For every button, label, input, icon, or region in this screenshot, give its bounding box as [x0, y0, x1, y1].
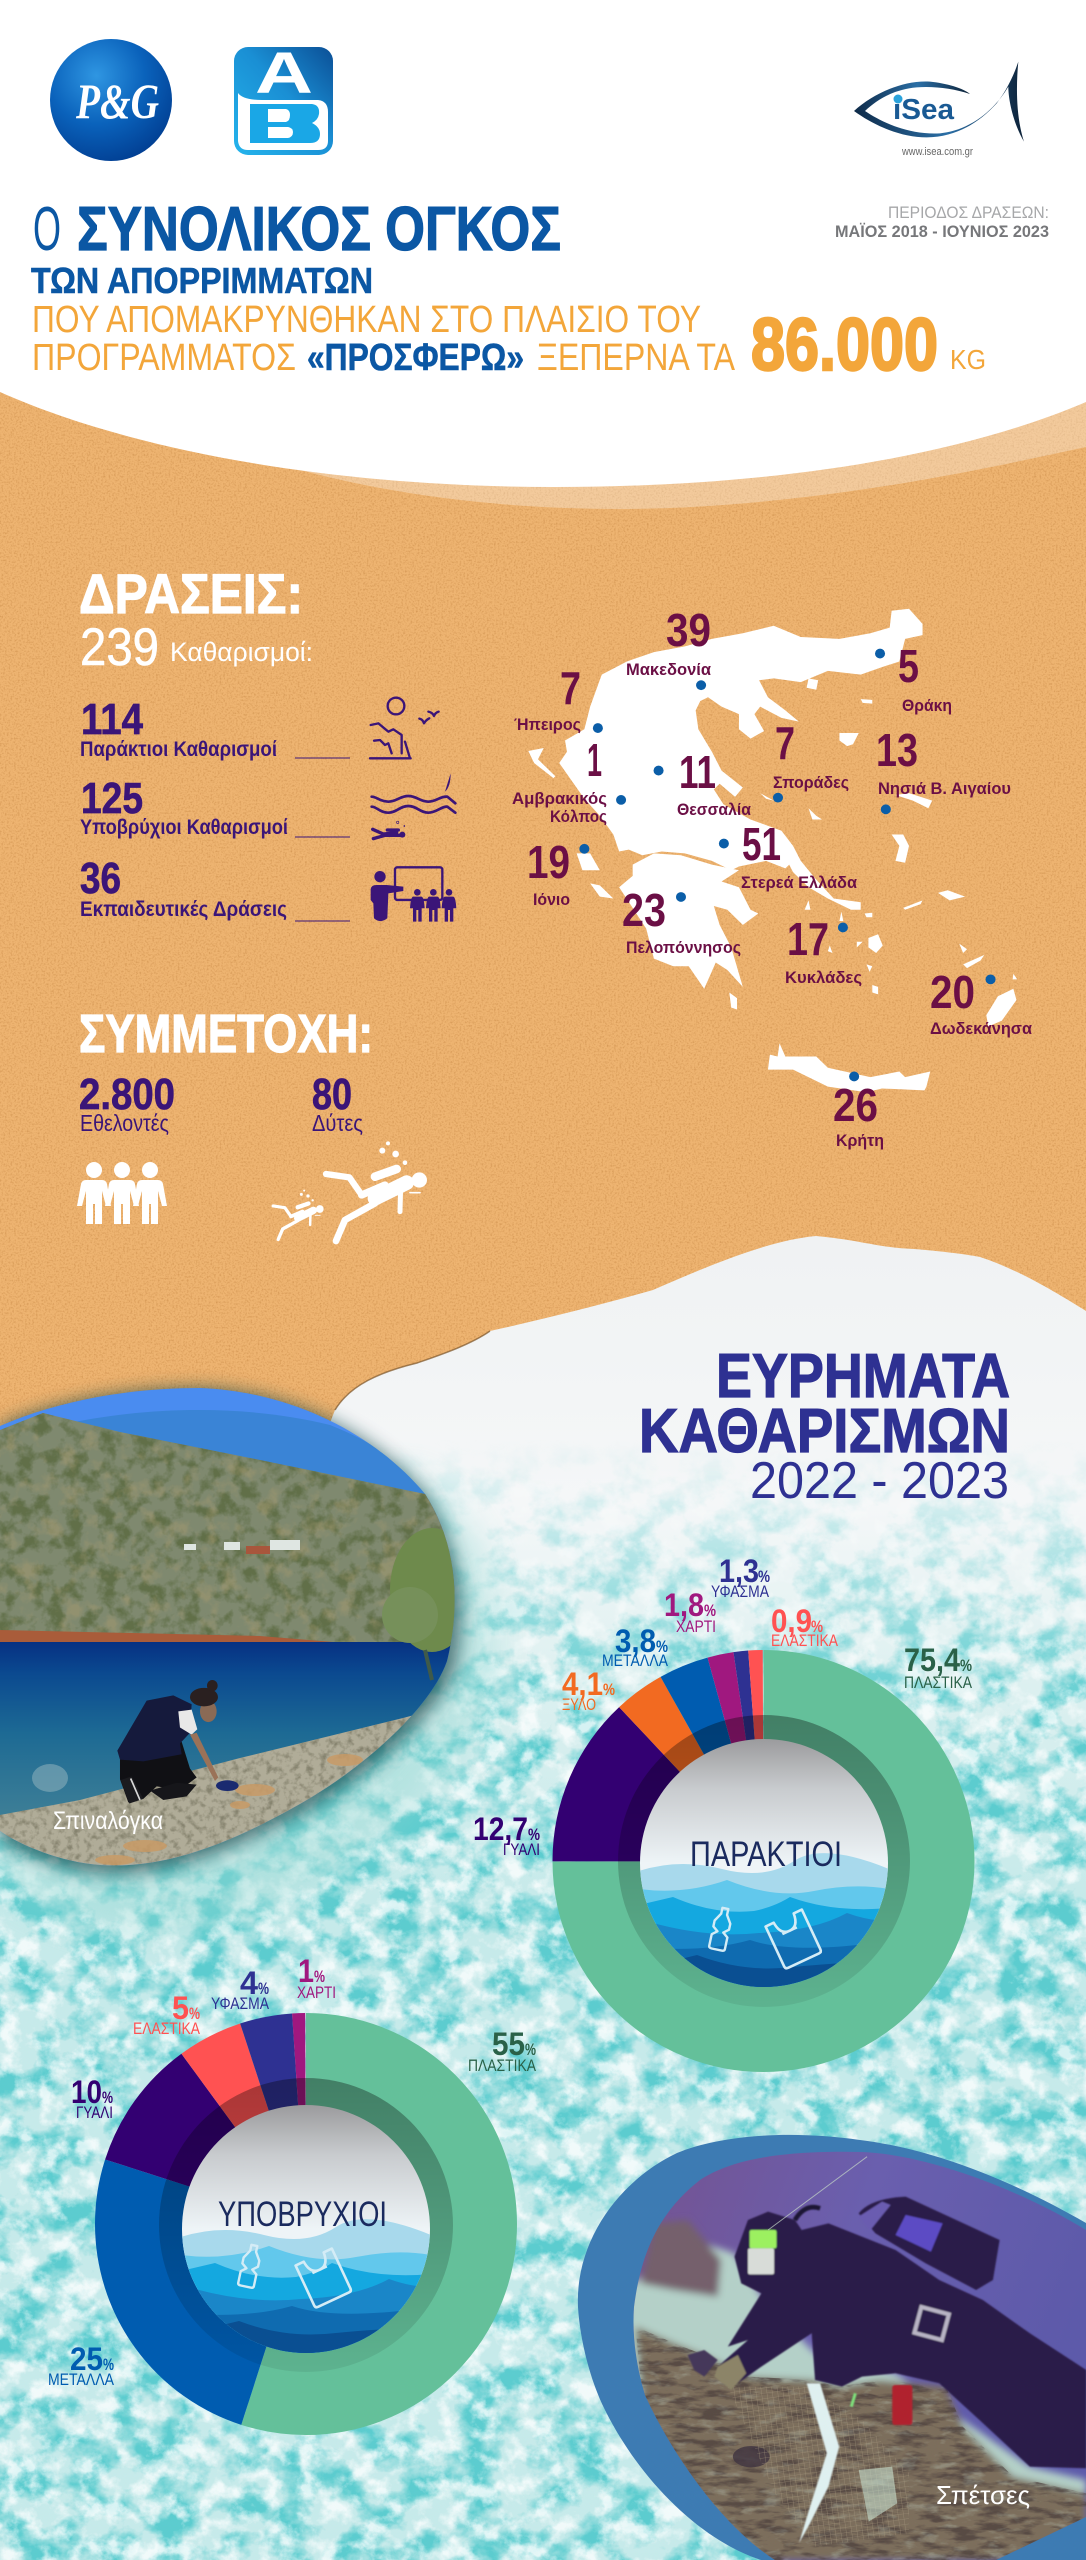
total cleanups: 239: [80, 618, 159, 677]
caption: Spetses: Σπέτσες: [936, 2480, 1030, 2510]
region: Peloponnese: 23: [622, 884, 666, 936]
seagrass texture: [627, 2320, 1086, 2560]
background: sand: [0, 380, 1086, 1480]
region: Central Greece: Στερεά Ελλάδα: [741, 873, 858, 892]
label: metals 25%: %: [103, 2355, 114, 2374]
label: glass 12.7%: 12,7: [473, 1811, 528, 1847]
label: plastics 55%: 55: [492, 2026, 525, 2062]
label: glass 12.7%: %: [528, 1825, 540, 1844]
region: Thrace: [898, 640, 952, 715]
label: elastics 0.9%: 0,9: [771, 1603, 812, 1639]
sea disc: [181, 2105, 431, 2359]
photo: Spetses: [627, 2145, 1086, 2560]
label: metals 3.8%: [602, 1623, 669, 1670]
label: plastics 75.4%: ΠΛΑΣΤΙΚΑ: [904, 1673, 973, 1692]
heading: actions: ΔΡΑΣΕΙΣ:: [79, 562, 303, 625]
heading: findings: ΚΑΘΑΡΙΣΜΩΝ: [639, 1397, 1010, 1466]
icon: plastic bag: [766, 1910, 822, 1969]
region: Thrace: 5: [898, 640, 919, 692]
stat: educational actions: [80, 854, 350, 921]
region: Peloponnese: [622, 884, 741, 957]
logo: P&G: P&G: [75, 73, 159, 129]
region: Crete: 26: [833, 1079, 878, 1131]
region: Thrace: Θράκη: [902, 696, 952, 715]
icon: beach: [370, 698, 439, 758]
region: Sporades: 7: [775, 717, 795, 769]
heading: findings: 2022 - 2023: [750, 1452, 1009, 1510]
label: fabric 4%: %: [258, 1979, 269, 1998]
label: metals 3.8%: %: [656, 1637, 668, 1656]
heading: findings: [639, 1342, 1010, 1510]
label: wood 4.1%: %: [603, 1680, 615, 1699]
foam and water background: [0, 1236, 1086, 2560]
region: Cyclades: Κυκλάδες: [785, 968, 862, 987]
label: elastics 0.9%: %: [811, 1617, 823, 1636]
label: elastics 5%: 5: [172, 1990, 189, 2026]
title: ΤΩΝ ΑΠΟΡΡΙΜΜΑΤΩΝ: [31, 260, 373, 301]
region: Epirus: 7: [560, 662, 581, 714]
label: glass 12.7%: ΓΥΑΛΙ: [503, 1840, 540, 1859]
region: Sporades: Σποράδες: [773, 773, 849, 792]
diver: [688, 2197, 1086, 2543]
region: Cyclades: [785, 913, 862, 987]
label: paper 1.8%: 1,8: [664, 1587, 704, 1623]
stat: divers: Δύτες: [312, 1110, 363, 1136]
label: fabric 1.3%: %: [758, 1567, 770, 1586]
period of actions: ΜΑΪΟΣ 2018 - ΙΟΥΝΙΟΣ 2023: [835, 222, 1049, 241]
region: Ionian: [527, 836, 570, 909]
region: Central Greece: 51: [742, 818, 781, 870]
stat: educational actions: Εκπαιδευτικές Δράσεις: [80, 898, 287, 921]
label: paper 1.8%: ΧΑΡΤΙ: [676, 1617, 716, 1636]
region: Cyclades: 17: [787, 913, 829, 965]
total cleanups: [80, 618, 313, 677]
donut chart: coastal: [618, 1715, 910, 2007]
region: Amvrakikos Gulf: [512, 734, 607, 826]
icon: bottle: [238, 2244, 262, 2288]
period of actions: ΠΕΡΙΟΔΟΣ ΔΡΑΣΕΩΝ:: [888, 203, 1049, 222]
title: [31, 195, 986, 386]
donut title: ΠΑΡΑΚΤΙΟΙ: [690, 1835, 842, 1874]
icon: plastic bag: [296, 2249, 352, 2308]
region: North Aegean: 13: [876, 724, 918, 776]
title: 86.000: [751, 303, 938, 386]
logo: iSea: iSea: [893, 94, 955, 126]
label: paper 1.8%: [664, 1587, 716, 1636]
region: North Aegean: [876, 724, 1011, 798]
region: Peloponnese: Πελοπόννησος: [626, 938, 741, 957]
label: paper 1.8%: %: [704, 1601, 716, 1620]
label: wood 4.1%: 4,1: [562, 1666, 603, 1702]
label: elastics 5%: [133, 1990, 201, 2038]
icon: waves and diver: [372, 773, 455, 839]
title: ΣΥΝΟΛΙΚΟΣ ΟΓΚΟΣ: [77, 195, 561, 264]
caption: Spinalonga: Σπιναλόγκα: [53, 1807, 163, 1835]
panel: participation: [77, 1004, 427, 1241]
logo: iSea: www.isea.com.gr: [901, 146, 973, 158]
title: Ο: [33, 195, 61, 264]
label: fabric 1.3%: [711, 1553, 770, 1601]
label: paper 1%: %: [314, 1967, 325, 1986]
dark gap under the net: [733, 2446, 770, 2467]
title: «ΠΡΟΣΦΕΡΩ»: [307, 337, 524, 379]
title: ΠΡΟΓΡΑΜΜΑΤΟΣ: [32, 337, 296, 379]
region: Dodecanese: 20: [930, 966, 975, 1018]
label: metals 25%: [48, 2341, 115, 2389]
donut title: ΥΠΟΒΡΥΧΙΟΙ: [218, 2195, 387, 2234]
photo halo: Spinalonga: [0, 1480, 494, 1933]
title: KG: [950, 344, 986, 375]
fishing net: [728, 2387, 909, 2547]
map of Greece: [512, 604, 1033, 1150]
icon: volunteers: [77, 1162, 167, 1224]
region: Thessaly: [677, 746, 752, 819]
label: fabric 4%: [211, 1965, 270, 2013]
label: metals 3.8%: ΜΕΤΑΛΛΑ: [602, 1651, 669, 1670]
heading: findings: ΕΥΡΗΜΑΤΑ: [716, 1342, 1010, 1411]
sand grain texture: [0, 380, 1086, 1480]
period of actions: [835, 203, 1049, 241]
region: North Aegean: Νησιά Β. Αιγαίου: [878, 779, 1011, 798]
stat: underwater cleanups: [80, 774, 350, 839]
label: fabric 4%: ΥΦΑΣΜΑ: [211, 1994, 270, 2013]
heading: participation: ΣΥΜΜΕΤΟΧΗ:: [79, 1004, 373, 1064]
region: Thessaly: 11: [679, 746, 716, 798]
translucent wave band: [300, 395, 1086, 509]
region: Dodecanese: Δωδεκάνησα: [930, 1019, 1033, 1038]
label: glass 10%: ΓΥΑΛΙ: [76, 2103, 113, 2122]
region: Sporades: [773, 717, 849, 792]
region: Macedonia: 39: [666, 604, 711, 656]
label: paper 1%: 1: [298, 1953, 314, 1989]
label: plastics 55%: %: [525, 2040, 536, 2059]
white header wave: [0, 0, 1086, 487]
label: metals 3.8%: 3,8: [615, 1623, 656, 1659]
stat: coastal cleanups: [80, 695, 350, 761]
inner shadow ring: [618, 1715, 910, 2007]
region: Central Greece: [741, 818, 858, 892]
donut chart: underwater: [159, 2078, 453, 2372]
icon: teacher with students: [371, 867, 456, 922]
label: fabric 1.3%: 1,3: [719, 1553, 759, 1589]
region: Macedonia: Μακεδονία: [626, 660, 712, 679]
stat: volunteers: [79, 1070, 175, 1136]
inner shadow ring: [159, 2078, 453, 2372]
region: Amvrakikos Gulf: Αμβρακικός: [512, 789, 607, 808]
label: elastics 0.9%: ΕΛΑΣΤΙΚΑ: [771, 1631, 839, 1650]
label: glass 10%: %: [102, 2088, 113, 2107]
stat: volunteers: 2.800: [79, 1070, 175, 1119]
label: glass 12.7%: [473, 1811, 540, 1859]
label: plastics 75.4%: [904, 1642, 973, 1692]
region: Ionian: Ιόνιο: [533, 890, 570, 909]
map location dots: [579, 649, 996, 1081]
label: elastics 0.9%: [771, 1603, 839, 1650]
label: fabric 1.3%: ΥΦΑΣΜΑ: [711, 1582, 770, 1601]
label: plastics 55%: ΠΛΑΣΤΙΚΑ: [468, 2056, 537, 2075]
label: metals 25%: ΜΕΤΑΛΛΑ: [48, 2370, 115, 2389]
region: Macedonia: [626, 604, 712, 679]
stat: divers: 80: [312, 1070, 352, 1119]
photo shadow: Spinalonga: [0, 1388, 461, 1874]
label: glass 10%: 10: [71, 2074, 102, 2110]
label: paper 1%: ΧΑΡΤΙ: [297, 1983, 336, 2002]
photo frame: Spetses: [578, 2135, 1086, 2560]
title: ΠΟΥ ΑΠΟΜΑΚΡΥΝΘΗΚΑΝ ΣΤΟ ΠΛΑΙΣΙΟ ΤΟΥ: [32, 299, 701, 341]
region: Ionian: 19: [527, 836, 570, 888]
logo: P&G: [50, 39, 172, 161]
label: elastics 5%: ΕΛΑΣΤΙΚΑ: [133, 2019, 201, 2038]
donut slices: underwater: [200, 2118, 412, 2330]
stat: underwater cleanups: Υποβρύχιοι Καθαρισμοί: [80, 816, 288, 839]
stat: coastal cleanups: 114: [81, 695, 143, 744]
label: wood 4.1%: ΞΥΛΟ: [562, 1695, 596, 1714]
logo: AB: Α: [255, 41, 313, 106]
label: elastics 5%: %: [189, 2004, 200, 2023]
label: plastics 75.4%: 75,4: [904, 1642, 960, 1678]
total cleanups: Καθαρισμοί:: [170, 637, 313, 667]
sea disc: [639, 1739, 889, 1993]
label: wood 4.1%: [562, 1666, 615, 1714]
region: Epirus: [514, 662, 581, 734]
region: Thessaly: Θεσσαλία: [677, 800, 752, 819]
region: Dodecanese: [930, 966, 1033, 1038]
stat: educational actions: 36: [80, 854, 121, 903]
donut slices: coastal: [658, 1756, 869, 1966]
logo: iSea: [854, 62, 1024, 158]
logo: AB: [234, 41, 333, 155]
stat: underwater cleanups: 125: [81, 774, 143, 823]
icon: divers: [273, 1141, 427, 1241]
stat: coastal cleanups: Παράκτιοι Καθαρισμοί: [80, 738, 277, 761]
label: plastics 55%: [468, 2026, 537, 2075]
title: ΞΕΠΕΡΝΑ ΤΑ: [537, 337, 736, 379]
icon: bottle: [709, 1907, 733, 1951]
panel: actions: [79, 562, 456, 922]
map landmass: [528, 609, 1017, 1092]
region: Crete: Κρήτη: [836, 1131, 884, 1150]
label: paper 1%: [297, 1953, 336, 2002]
region: Epirus: Ήπειρος: [514, 715, 581, 734]
stat: volunteers: Εθελοντές: [80, 1110, 169, 1136]
seabed sand and grass, soft: [627, 2220, 1086, 2560]
person collecting litter: [117, 1680, 239, 1804]
region: Amvrakikos Gulf: Κόλπος: [550, 807, 607, 826]
label: plastics 75.4%: %: [960, 1656, 972, 1675]
region: Amvrakikos Gulf: 1: [587, 734, 602, 786]
label: fabric 4%: 4: [240, 1965, 258, 2001]
label: metals 25%: 25: [70, 2341, 103, 2377]
label: glass 10%: [71, 2074, 113, 2122]
photo: Spinalonga: [0, 1380, 480, 1880]
